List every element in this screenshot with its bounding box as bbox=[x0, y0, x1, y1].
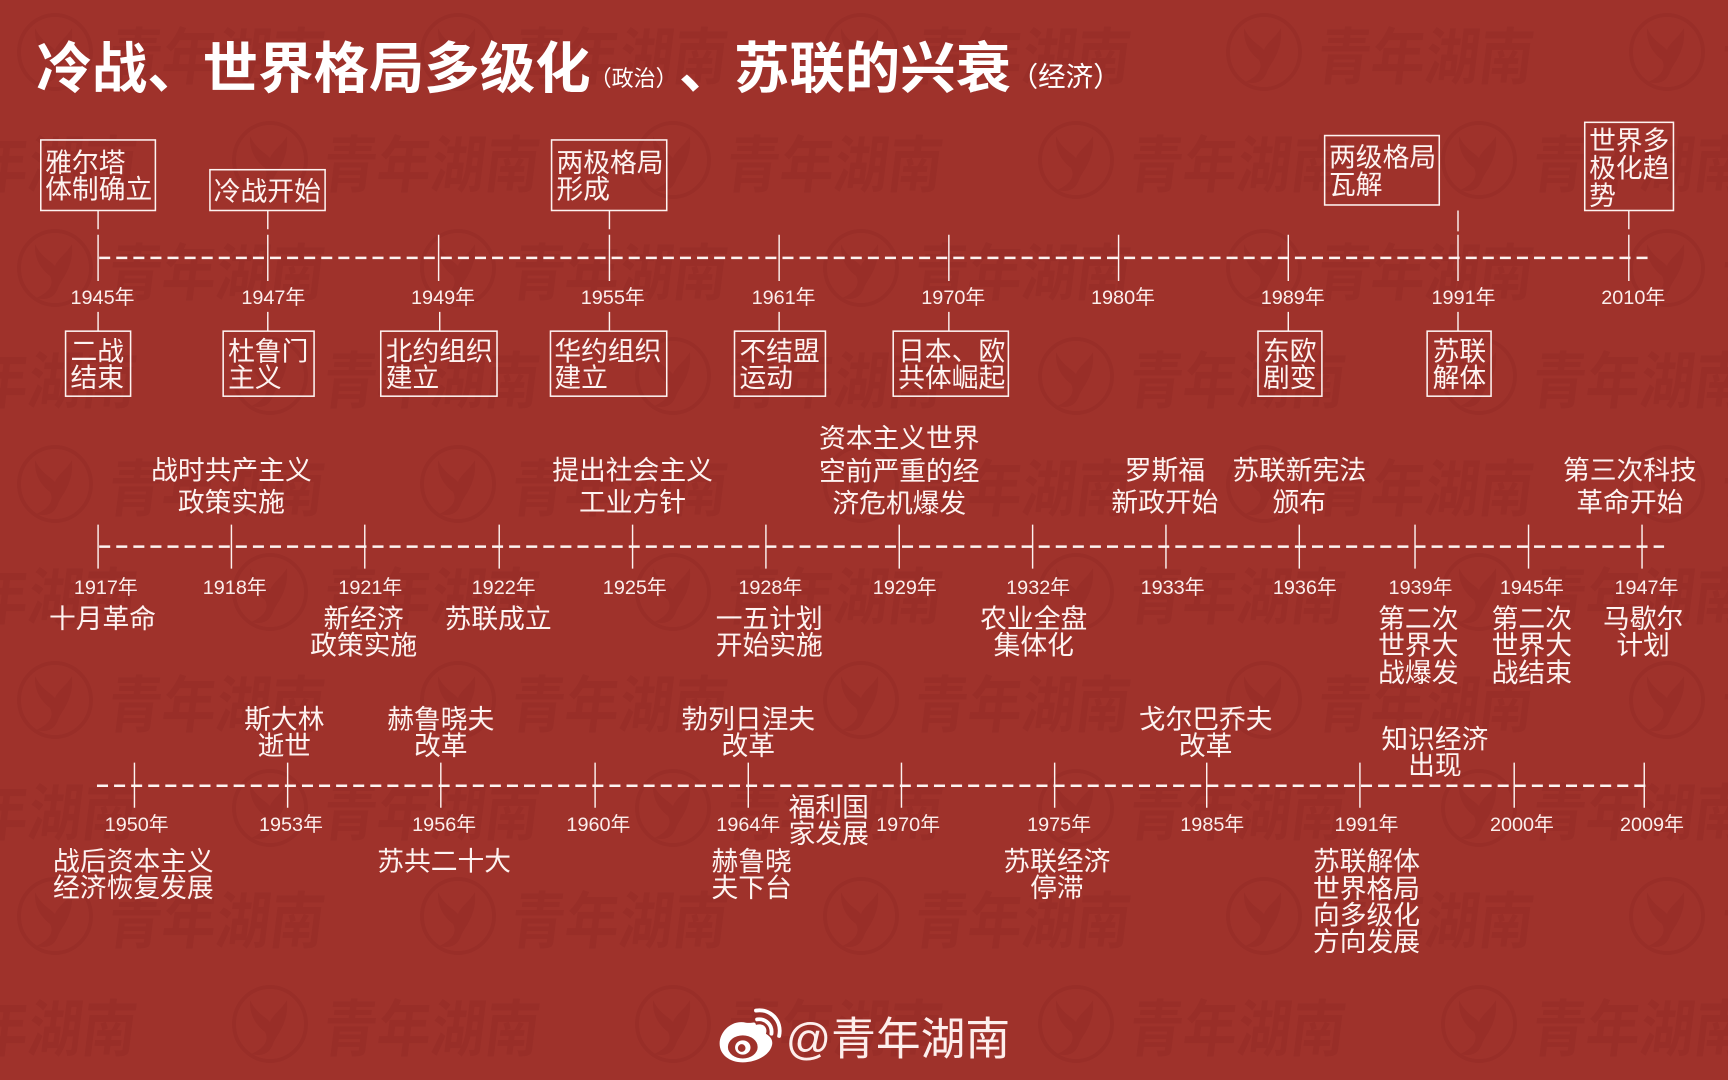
events below timeline 3: 夫下台 bbox=[711, 873, 792, 903]
box: 日本、欧共体崛起: 共体崛起 bbox=[898, 363, 1005, 393]
box: 东欧剧变: 剧变 bbox=[1263, 363, 1316, 393]
events below timeline 2: 集体化 bbox=[994, 631, 1074, 661]
box: 两级格局瓦解: 两级格局 bbox=[1329, 142, 1436, 172]
events above timeline 2: 济危机爆发 bbox=[832, 488, 966, 518]
box: 杜鲁门主义: 杜鲁门 bbox=[228, 336, 308, 366]
timeline 2: economy 1917-1947: 1929年 bbox=[873, 577, 937, 599]
events below timeline 3: 战后资本主义 bbox=[53, 847, 214, 877]
box: 冷战开始 bbox=[210, 170, 325, 210]
events above timeline 3: 出现 bbox=[1408, 751, 1462, 781]
box: 两级格局瓦解: 瓦解 bbox=[1329, 170, 1383, 200]
title: （经济） bbox=[1011, 61, 1121, 92]
events below timeline 2: 开始实施 bbox=[716, 631, 823, 661]
timeline 3: economy 1950-2009: 1964年 bbox=[716, 814, 780, 836]
events above timeline 3: 逝世 bbox=[258, 731, 311, 761]
box: 日本、欧共体崛起: 日本、欧 bbox=[898, 336, 1005, 366]
box: 世界多极化趋势: 极化趋 bbox=[1589, 153, 1669, 183]
timeline 3: economy 1950-2009 bbox=[97, 763, 1684, 836]
events above timeline 3: 戈尔巴乔夫 bbox=[1139, 704, 1273, 734]
events below timeline 2: 世界大 bbox=[1492, 631, 1572, 661]
timeline 2: economy 1917-1947: 1921年 bbox=[338, 577, 402, 599]
events below timeline 3: 苏共二十大 bbox=[377, 847, 511, 877]
events above timeline 2: 政策实施 bbox=[178, 487, 285, 517]
box: 北约组织建立: 北约组织 bbox=[386, 336, 493, 366]
timeline 2: economy 1917-1947: 1939年 bbox=[1389, 577, 1453, 599]
box: 华约组织建立: 建立 bbox=[554, 363, 608, 393]
box: 北约组织建立: 建立 bbox=[386, 363, 439, 393]
timeline 3: economy 1950-2009: 1953年 bbox=[259, 814, 323, 836]
events above timeline 3: 改革 bbox=[414, 731, 468, 761]
events below timeline 2: 第二次 bbox=[1492, 604, 1572, 634]
events below timeline 2: 战爆发 bbox=[1378, 658, 1458, 688]
events above timeline 3: 家发展 bbox=[789, 819, 869, 849]
timeline 2: economy 1917-1947: 1917年 bbox=[74, 577, 138, 599]
box: 东欧剧变: 东欧 bbox=[1263, 336, 1316, 366]
events below timeline 3 bbox=[53, 847, 1420, 957]
events below timeline 2: 计划 bbox=[1616, 631, 1670, 661]
box: 苏联解体 bbox=[1427, 331, 1491, 396]
timeline 2: economy 1917-1947: 1932年 bbox=[1006, 577, 1070, 599]
timeline 2: economy 1917-1947: 1945年 bbox=[1500, 577, 1564, 599]
timeline 1: politics 1945-2010 bbox=[71, 210, 1665, 331]
timeline 1: politics 1945-2010: 1947年 bbox=[241, 287, 305, 309]
timeline 2: economy 1917-1947: 1933年 bbox=[1141, 577, 1205, 599]
events above timeline 2: 罗斯福 bbox=[1125, 455, 1205, 485]
events above timeline 3: 改革 bbox=[722, 731, 775, 761]
timeline 3: economy 1950-2009: 2000年 bbox=[1490, 814, 1554, 836]
box: 苏联解体: 解体 bbox=[1433, 363, 1486, 393]
events below timeline 2 bbox=[49, 604, 1683, 688]
events above timeline 3: 勃列日涅夫 bbox=[681, 704, 815, 734]
timeline 3: economy 1950-2009: 1960年 bbox=[566, 814, 630, 836]
timeline 2: economy 1917-1947: 1918年 bbox=[203, 577, 267, 599]
box: 二战结束: 结束 bbox=[71, 363, 124, 393]
box: 北约组织建立 bbox=[381, 331, 497, 396]
timeline 1: politics 1945-2010: 2010年 bbox=[1601, 287, 1665, 309]
timeline 3: economy 1950-2009: 2009年 bbox=[1620, 814, 1684, 836]
box: 雅尔塔体制确立 bbox=[41, 140, 155, 210]
box: 雅尔塔体制确立: 体制确立 bbox=[45, 174, 152, 204]
events above timeline 2: 工业方针 bbox=[579, 487, 686, 517]
events below timeline 3: 苏联经济 bbox=[1003, 847, 1111, 877]
box: 华约组织建立: 华约组织 bbox=[554, 336, 661, 366]
title: 冷战、世界格局多级化 bbox=[36, 38, 591, 100]
timeline 2: economy 1917-1947: 1922年 bbox=[472, 577, 536, 599]
timeline 1: politics 1945-2010: 1970年 bbox=[921, 287, 985, 309]
timeline 2: economy 1917-1947: 1947年 bbox=[1614, 577, 1678, 599]
timeline 3: economy 1950-2009: 1956年 bbox=[412, 814, 476, 836]
timeline 3: economy 1950-2009: 1991年 bbox=[1335, 814, 1399, 836]
title: （政治） bbox=[590, 66, 678, 91]
timeline 1: politics 1945-2010: 1955年 bbox=[581, 287, 645, 309]
events above timeline 2: 空前严重的经 bbox=[819, 456, 980, 486]
events below timeline 2: 十月革命 bbox=[49, 604, 156, 634]
events below timeline 2: 世界大 bbox=[1378, 631, 1458, 661]
events below timeline 2: 新经济 bbox=[324, 604, 404, 634]
events below timeline 2: 农业全盘 bbox=[980, 604, 1087, 634]
box: 两极格局形成: 两极格局 bbox=[557, 148, 664, 178]
events below timeline 3: 经济恢复发展 bbox=[53, 873, 214, 903]
box: 华约组织建立 bbox=[550, 331, 667, 396]
box: 二战结束 bbox=[66, 331, 131, 396]
timeline 2: economy 1917-1947: 1925年 bbox=[603, 577, 667, 599]
box: 两极格局形成 bbox=[552, 140, 667, 210]
timeline 3: economy 1950-2009: 1985年 bbox=[1180, 814, 1244, 836]
events below timeline 3: 停滞 bbox=[1030, 873, 1084, 903]
title bbox=[36, 38, 1121, 100]
box: 苏联解体: 苏联 bbox=[1433, 336, 1486, 366]
timeline 1: politics 1945-2010: 1991年 bbox=[1432, 287, 1495, 309]
timeline 3: economy 1950-2009: 1970年 bbox=[876, 814, 940, 836]
box: 雅尔塔体制确立: 雅尔塔 bbox=[45, 148, 126, 178]
box: 杜鲁门主义: 主义 bbox=[228, 363, 282, 393]
timeline 3: economy 1950-2009: 1950年 bbox=[105, 814, 169, 836]
box: 不结盟运动: 运动 bbox=[739, 363, 793, 393]
timeline 1: politics 1945-2010: 1945年 bbox=[71, 287, 134, 309]
box: 不结盟运动: 不结盟 bbox=[739, 336, 820, 366]
events above timeline 3: 知识经济 bbox=[1381, 724, 1489, 754]
box: 两级格局瓦解 bbox=[1325, 136, 1439, 205]
events above timeline 2 bbox=[151, 423, 1697, 518]
events below timeline 3: 苏联解体 bbox=[1313, 847, 1420, 877]
timeline 1: politics 1945-2010: 1949年 bbox=[411, 287, 475, 309]
events above timeline 3: 斯大林 bbox=[244, 704, 324, 734]
timeline 1: politics 1945-2010: 1961年 bbox=[752, 287, 816, 309]
events below timeline 2: 一五计划 bbox=[716, 604, 823, 634]
events below timeline 2: 战结束 bbox=[1492, 658, 1572, 688]
box: 二战结束: 二战 bbox=[71, 336, 124, 366]
box: 东欧剧变 bbox=[1258, 331, 1322, 396]
events above timeline 2: 苏联新宪法 bbox=[1232, 455, 1366, 485]
events above timeline 2: 战时共产主义 bbox=[151, 455, 312, 485]
events above timeline 3: 福利国 bbox=[789, 793, 869, 823]
box: 世界多极化趋势: 世界多 bbox=[1589, 126, 1669, 156]
box: 日本、欧共体崛起 bbox=[893, 331, 1008, 396]
events below timeline 2: 政策实施 bbox=[310, 631, 417, 661]
box: 不结盟运动 bbox=[735, 331, 825, 396]
timeline 2: economy 1917-1947 bbox=[74, 525, 1678, 599]
events above timeline 2: 资本主义世界 bbox=[819, 423, 980, 453]
events above timeline 3: 改革 bbox=[1179, 731, 1232, 761]
events below timeline 3: 方向发展 bbox=[1313, 927, 1420, 957]
events above timeline 2: 第三次科技 bbox=[1563, 455, 1697, 485]
icon: weibo logo bbox=[720, 1010, 780, 1062]
timeline 2: economy 1917-1947: 1928年 bbox=[738, 577, 802, 599]
title: 苏联的兴衰 bbox=[734, 38, 1011, 100]
events below timeline 3: 向多级化 bbox=[1313, 901, 1420, 931]
events above timeline 3: 赫鲁晓夫 bbox=[387, 704, 494, 734]
events below timeline 3: 赫鲁晓 bbox=[711, 847, 792, 877]
box: 冷战开始: 冷战开始 bbox=[214, 177, 321, 207]
timeline 3: economy 1950-2009: 1975年 bbox=[1027, 814, 1091, 836]
events above timeline 2: 新政开始 bbox=[1111, 487, 1218, 517]
timeline 2: economy 1917-1947: 1936年 bbox=[1273, 577, 1337, 599]
source credit: @青年湖南 bbox=[786, 1015, 1010, 1065]
events below timeline 2: 马歇尔 bbox=[1603, 604, 1683, 634]
timeline 1: politics 1945-2010: 1980年 bbox=[1091, 287, 1155, 309]
events below timeline 2: 第二次 bbox=[1378, 604, 1458, 634]
box: 世界多极化趋势: 势 bbox=[1589, 181, 1616, 211]
box: 两极格局形成: 形成 bbox=[557, 174, 610, 204]
box: 世界多极化趋势 bbox=[1585, 122, 1673, 211]
events below timeline 3: 世界格局 bbox=[1313, 874, 1420, 904]
events below timeline 2: 苏联成立 bbox=[445, 604, 552, 634]
events above timeline 2: 颁布 bbox=[1273, 487, 1326, 517]
timeline 1: politics 1945-2010: 1989年 bbox=[1261, 287, 1325, 309]
events above timeline 3 bbox=[244, 704, 1489, 849]
events above timeline 2: 革命开始 bbox=[1576, 487, 1683, 517]
box: 杜鲁门主义 bbox=[223, 331, 314, 396]
events above timeline 2: 提出社会主义 bbox=[552, 455, 713, 485]
title: 、 bbox=[679, 38, 734, 100]
